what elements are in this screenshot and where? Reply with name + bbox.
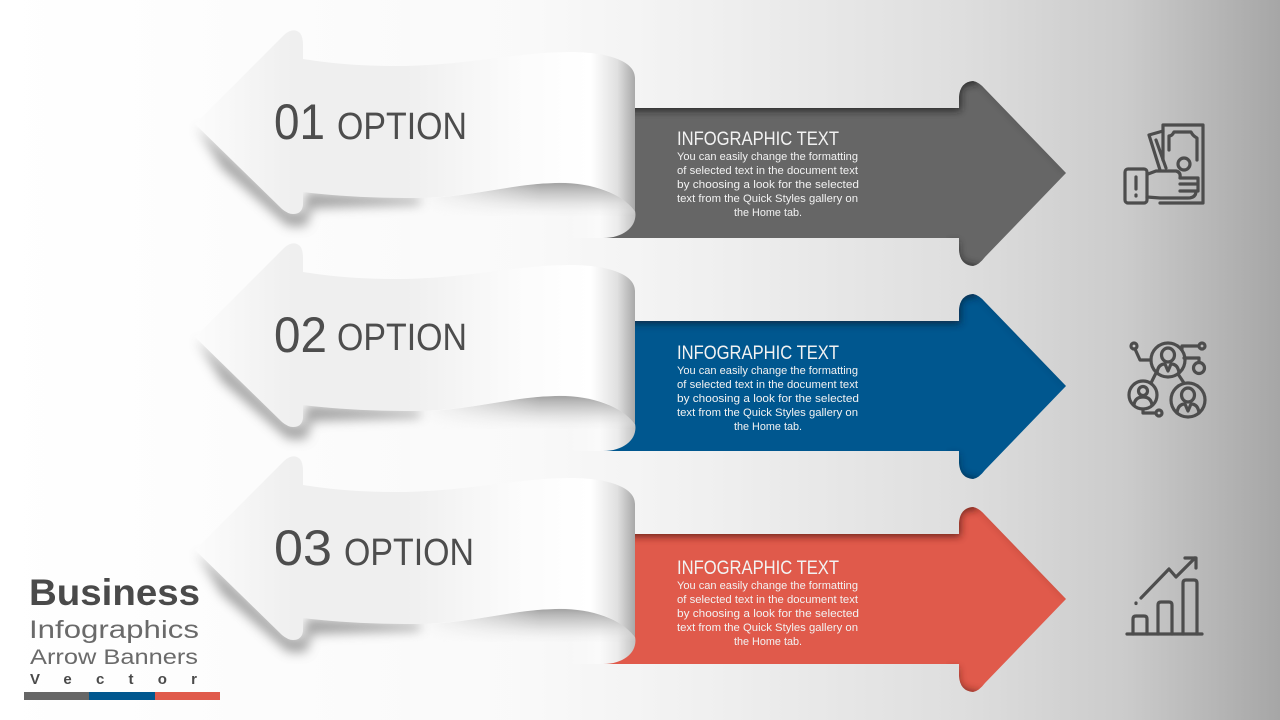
body text block: of selected text in the document text [677, 379, 858, 391]
body text block [677, 365, 859, 433]
paper arrow banner [195, 243, 635, 427]
number 02: 02 [274, 307, 327, 363]
subtitle: arrow banners: Arrow Banners [30, 646, 198, 669]
paper underside shadow [444, 608, 636, 639]
icon: growth chart [1127, 558, 1202, 634]
title block [24, 572, 220, 700]
body text block: the Home tab. [734, 207, 802, 219]
subtitle: infographics: Infographics [29, 616, 199, 644]
body text block: by choosing a look for the selected [677, 179, 859, 191]
body text block: text from the Quick Styles gallery on [677, 407, 858, 419]
heading: infographic text: INFOGRAPHIC TEXT [677, 343, 839, 364]
colour bars [24, 692, 220, 700]
right arrow: blue [600, 288, 1080, 483]
label option: OPTION [344, 532, 474, 574]
body text block: by choosing a look for the selected [677, 393, 859, 405]
paper curl [570, 609, 635, 664]
panel: option 03 row [195, 456, 1202, 696]
paper curl [570, 183, 635, 238]
body text block: by choosing a look for the selected [677, 608, 859, 620]
paper arrow shadow [197, 126, 420, 226]
heading: infographic text: INFOGRAPHIC TEXT [677, 129, 839, 150]
body text block [677, 151, 859, 219]
label option: OPTION [337, 317, 467, 359]
subtitle: vector: Vector [30, 671, 197, 688]
paper arrow shadow [197, 339, 420, 439]
right arrow: gray [600, 75, 1080, 270]
title: business: Business [29, 572, 200, 613]
paper underside shadow [444, 396, 636, 426]
heading: infographic text: INFOGRAPHIC TEXT [677, 558, 839, 579]
paper arrow shadow [197, 552, 420, 652]
number 01: 01 [274, 94, 325, 150]
number 03: 03 [274, 520, 332, 576]
body text block: text from the Quick Styles gallery on [677, 193, 858, 205]
label option: OPTION [337, 106, 467, 148]
paper curl [570, 396, 635, 451]
body text block: You can easily change the formatting [677, 365, 858, 377]
paper underside shadow [444, 182, 624, 210]
paper arrow banner [195, 30, 635, 214]
body text block: You can easily change the formatting [677, 151, 858, 163]
panel: option 01 row [195, 30, 1203, 270]
body text block [677, 580, 859, 648]
icon: people network [1129, 343, 1205, 417]
panel: option 02 row [195, 243, 1205, 483]
body text block: the Home tab. [734, 636, 802, 648]
body text block: text from the Quick Styles gallery on [677, 622, 858, 634]
body text block: of selected text in the document text [677, 594, 858, 606]
body text block: of selected text in the document text [677, 165, 858, 177]
icon: money in hand [1125, 125, 1203, 203]
body text block: You can easily change the formatting [677, 580, 858, 592]
paper arrow banner [195, 456, 635, 640]
body text block: the Home tab. [734, 421, 802, 433]
right arrow: red [600, 501, 1080, 696]
